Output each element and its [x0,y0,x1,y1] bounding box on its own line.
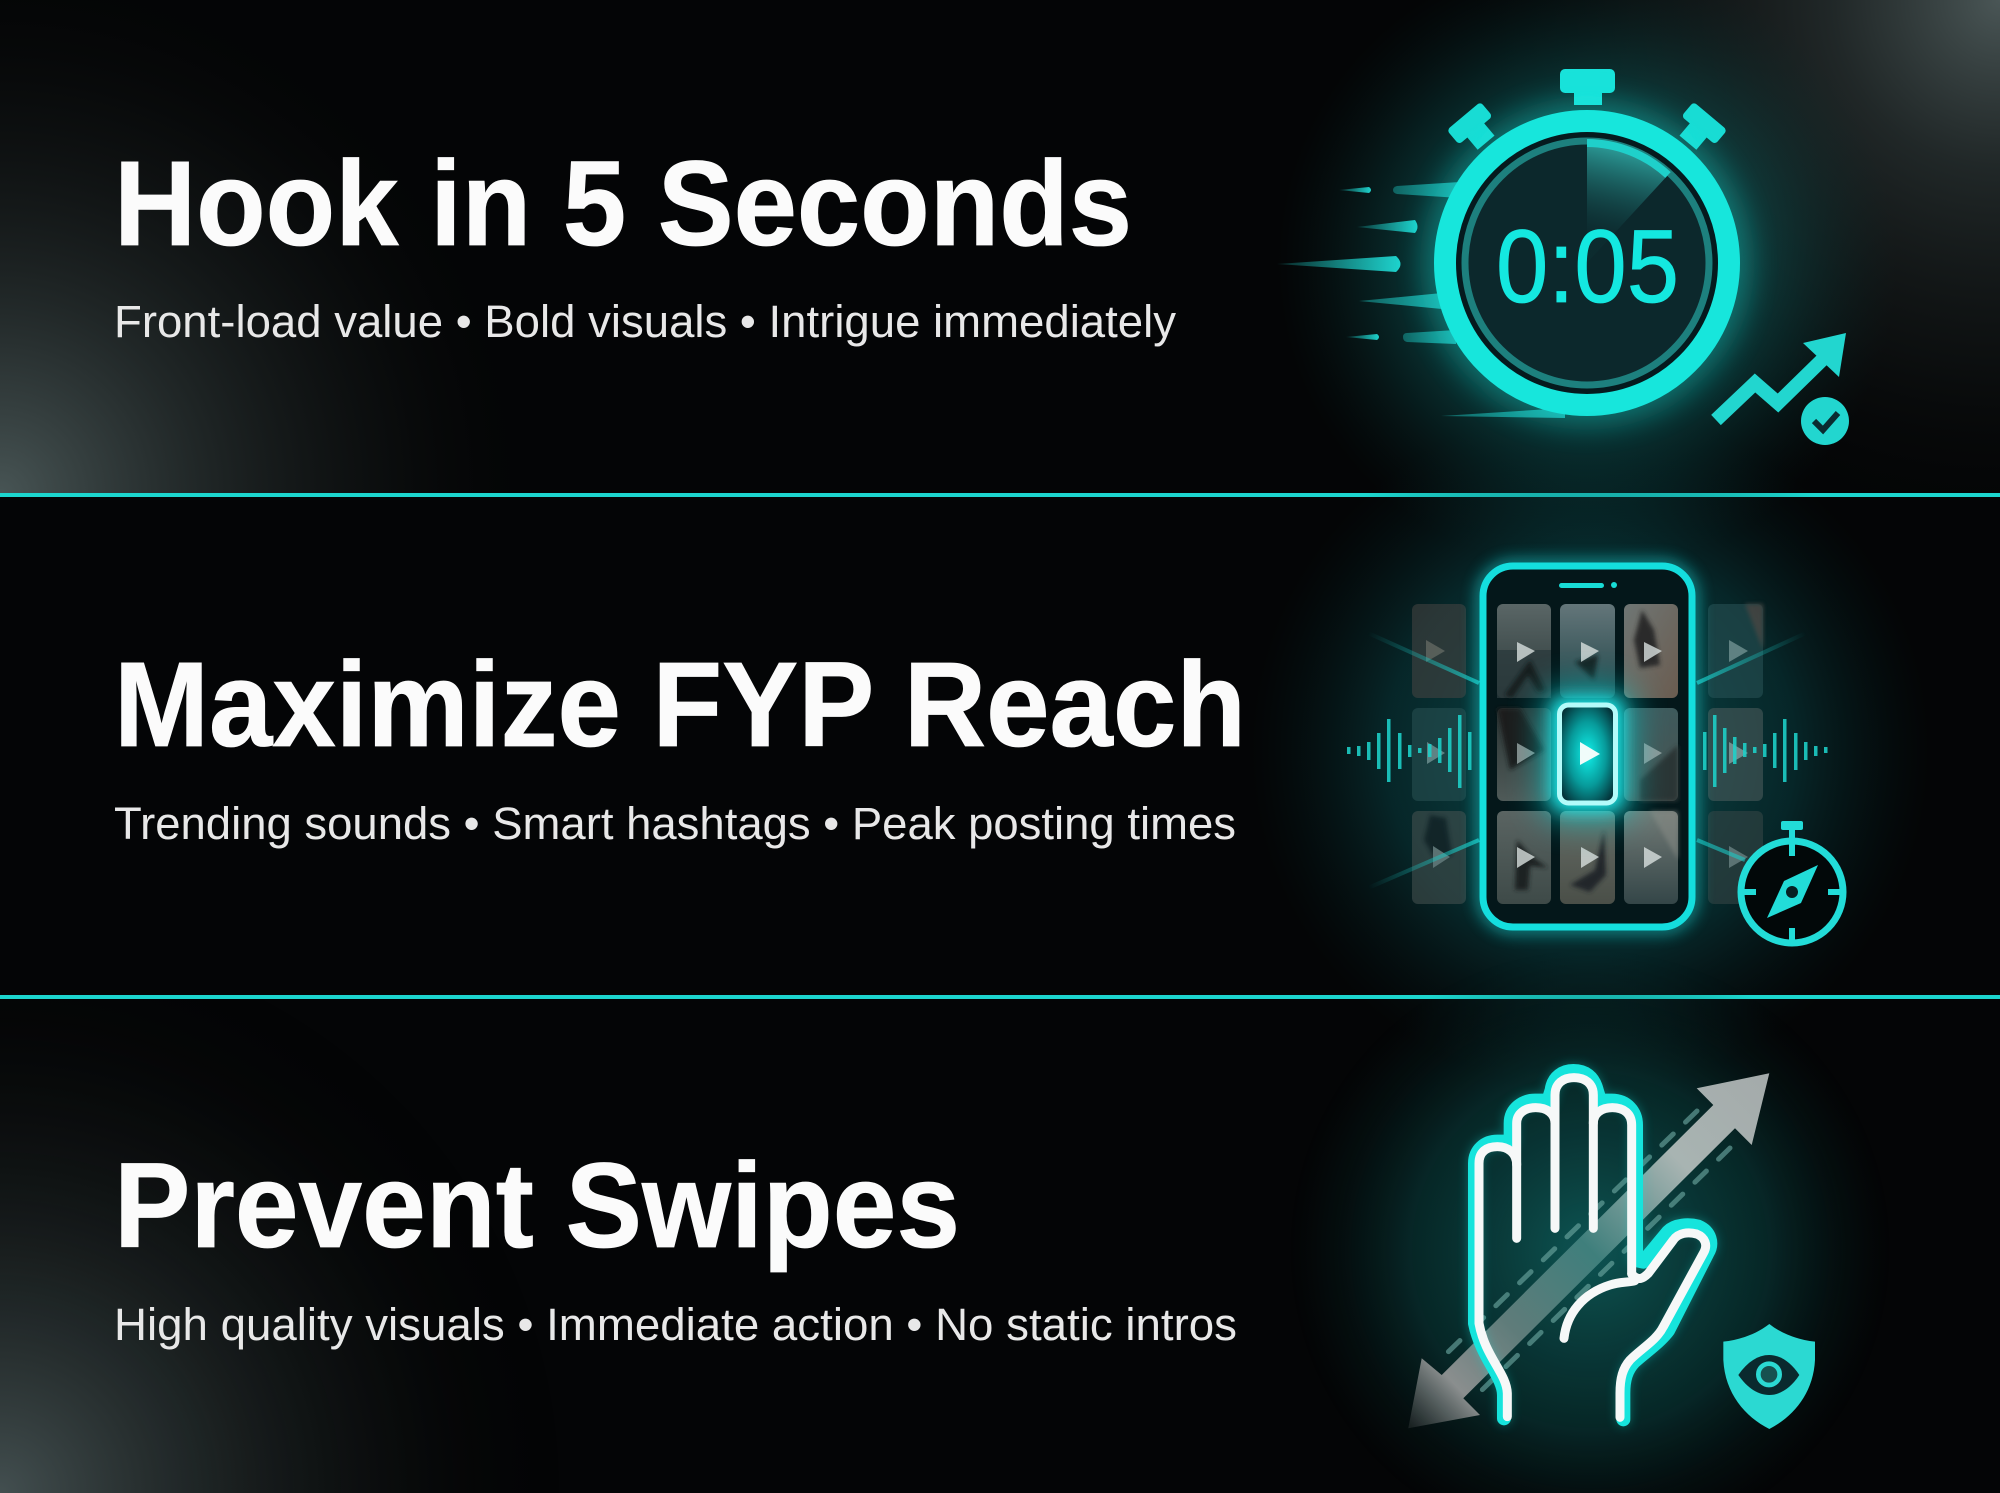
heading: maximize fyp reach: Maximize FYP Reach [114,636,1246,772]
icon: stopwatch with speed lines [1277,0,1897,573]
icon: compass stopwatch [1741,821,1843,943]
icon: raised hand over swipe arrow [1290,950,1890,1493]
speed lines [1277,182,1565,418]
panel: prevent swipes [0,950,2000,1493]
panel background glows [0,0,2000,495]
icon: growth arrow [1716,333,1846,420]
faded outer video tiles [1412,604,1763,904]
divider 2 [0,995,2000,999]
inner ring [1465,141,1709,385]
phone body [1483,566,1692,927]
phone glow [1483,566,1692,927]
swipe arrow [1408,1073,1769,1428]
panel: hook in 5 seconds [0,0,2000,573]
waveform left [1347,715,1472,788]
play icons [1517,642,1662,868]
icon: shield with eye [1723,1324,1815,1429]
text: hook tips: Front-load value • Bold visuals • Intrigue immediately [114,296,1177,347]
center play tile glow [1540,686,1635,822]
phone speaker [1559,582,1617,588]
stopwatch top button [1560,69,1615,105]
divider 1 [0,493,2000,497]
hand teal outline [1475,1071,1710,1419]
video tile grid [1497,604,1678,904]
center play tile [1560,705,1616,803]
panel: maximize fyp reach [114,410,1930,1090]
light rays [1368,633,1806,888]
text: swipe tips: High quality visuals • Immediate action • No static intros [114,1299,1237,1350]
hand white outline [1479,1078,1706,1417]
swipe dashes [1445,1111,1730,1390]
icon: phone with video feed [1250,410,1930,1090]
digital time display: 0:05 [1496,209,1679,325]
center play icon [1580,742,1600,765]
ring glow [1443,119,1731,407]
waveform right [1703,715,1828,787]
stopwatch side buttons [1447,102,1727,157]
stopwatch face [1455,131,1719,395]
icon: check badge [1801,397,1849,445]
panel background glow [0,999,2000,1493]
hand glow [1475,1071,1710,1419]
stopwatch outer ring [1445,121,1729,405]
elapsed wedge [1587,143,1668,263]
heading: hook in 5 seconds: Hook in 5 Seconds [114,135,1132,271]
text: reach tips: Trending sounds • Smart hashtags • Peak posting times [114,798,1236,849]
heading: prevent swipes: Prevent Swipes [114,1137,960,1273]
